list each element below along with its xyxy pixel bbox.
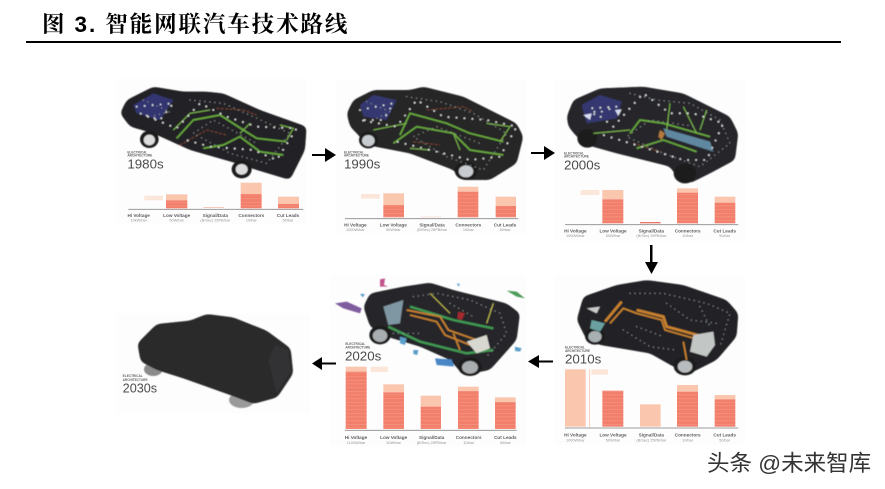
label: ELECTRICAL ARCHITECTURE 2020s (345, 342, 382, 363)
label: ELECTRICAL ARCHITECTURE 2010s: ARCHITECTURE (565, 349, 590, 353)
arrow: 2000s to 2010s (645, 245, 658, 274)
bar chart: 1990s: 50W/bar (386, 228, 401, 232)
label: ELECTRICAL ARCHITECTURE 2000s: ELECTRICAL (564, 151, 584, 155)
bar chart: 1990s: Hi Voltage (344, 222, 367, 227)
label: ELECTRICAL ARCHITECTURE 2010s: 2010s (565, 352, 602, 367)
bar chart: 1980s (127, 183, 303, 223)
bar chart: 2000s: (B/Sec) 25PB/bar (636, 234, 667, 238)
label: ELECTRICAL ARCHITECTURE 2020s: ELECTRICAL (345, 342, 365, 346)
bar chart: 1990s: 1000W/bar (346, 228, 365, 232)
bar chart: 1990s: (B/Sec) 25PB/bar (417, 228, 448, 232)
title: 图 3. 智能网联汽车技术路线 (42, 12, 349, 37)
bar chart: 2010s: Hi Voltage (564, 433, 587, 438)
bar chart: 2010s: 1000W/bar (566, 438, 585, 442)
label: ELECTRICAL ARCHITECTURE 2030s (123, 374, 157, 396)
bar chart: 2020s: Cut Leads (494, 435, 517, 440)
label: ELECTRICAL ARCHITECTURE 2010s: ELECTRICAL (565, 345, 585, 349)
label: ELECTRICAL ARCHITECTURE 2010s (565, 345, 602, 367)
bar chart: 2000s: Hi Voltage (564, 229, 587, 234)
bar chart: 1980s: 10/bar (246, 219, 257, 223)
bar chart: 2020s: Hi Voltage (345, 435, 368, 440)
arrow: 2020s to 2030s (312, 357, 336, 370)
bar chart: 1990s: 10/bar (463, 228, 474, 232)
label: ELECTRICAL ARCHITECTURE 2000s (564, 151, 601, 173)
bar chart: 2020s (345, 367, 517, 445)
panel: 2000s (555, 80, 745, 242)
bar chart: 1980s: (B/Sec) 25PB/bar (200, 219, 231, 223)
label: ELECTRICAL ARCHITECTURE 1980s: ELECTRICAL (127, 151, 147, 155)
car: covered 2030s (137, 314, 293, 408)
bar chart: 2010s: (B/Sec) 25PB/bar (636, 438, 667, 442)
label: ELECTRICAL ARCHITECTURE 1990s: ARCHITECTURE (344, 154, 369, 158)
bar chart: 1980s: Cut Leads (277, 213, 300, 218)
bar chart: 1980s: Hi Voltage (127, 213, 150, 218)
bar chart: 2000s: Cut Leads (713, 229, 736, 234)
label: ELECTRICAL ARCHITECTURE 2020s: 2020s (345, 348, 382, 363)
bar chart: 2020s: 50/bar (500, 441, 511, 445)
label: ELECTRICAL ARCHITECTURE 2030s: 2030s (123, 382, 157, 396)
bar chart: 2000s: Low Voltage (599, 229, 627, 234)
bar chart: 2020s: 50W/bar (386, 441, 402, 445)
bar chart: 2000s: Connectors (675, 229, 701, 234)
label: ELECTRICAL ARCHITECTURE 1990s: 1990s (344, 156, 381, 171)
bar chart: 2010s (564, 369, 738, 442)
label: ELECTRICAL ARCHITECTURE 1980s: 1980s (127, 156, 164, 171)
bar chart: 2000s: Signal/Data (639, 229, 664, 234)
bar chart: 2020s: 1100W/bar (347, 441, 366, 445)
car: 2020s (335, 278, 525, 376)
bar chart: 1980s: Connectors (238, 213, 265, 218)
bar chart: 2010s: 50/bar (719, 438, 731, 442)
attached sensors (335, 278, 525, 367)
panel: 1980s (117, 78, 307, 225)
bar chart: 1990s: Connectors (455, 222, 482, 227)
bar chart: 1980s: 50W/bar (169, 219, 185, 223)
car: 1980s (120, 87, 307, 180)
panel: 2010s (555, 275, 745, 445)
label: ELECTRICAL ARCHITECTURE 2000s: ARCHITECTURE (564, 155, 589, 159)
label: ELECTRICAL ARCHITECTURE 1990s: ELECTRICAL (344, 150, 364, 154)
bar chart: 1980s: Low Voltage (163, 213, 191, 218)
label: ELECTRICAL ARCHITECTURE 2030s: ARCHITECTURE (123, 378, 148, 382)
bar chart: 2010s: 10/bar (682, 438, 694, 442)
bar chart: 1990s: Signal/Data (419, 222, 445, 227)
car: 2000s (567, 87, 738, 183)
panel: 1990s (337, 80, 527, 233)
label: ELECTRICAL ARCHITECTURE 2030s: ELECTRICAL (123, 374, 143, 378)
arrow: 2010s to 2020s (528, 355, 553, 368)
label: ELECTRICAL ARCHITECTURE 1980s: ARCHITECTURE (127, 154, 152, 158)
bar chart: 1980s: Signal/Data (203, 213, 228, 218)
bar chart: 2020s: Low Voltage (380, 435, 408, 440)
bar chart: 2010s: Connectors (675, 433, 701, 438)
bar chart: 2010s: Low Voltage (599, 433, 627, 438)
bar chart: 2010s: Signal/Data (639, 433, 664, 438)
bar chart: 2020s: Signal/Data (419, 435, 445, 440)
bar chart: 2000s: 1000W/bar (566, 234, 585, 238)
car: 2010s (577, 280, 738, 375)
label: ELECTRICAL ARCHITECTURE 2000s: 2000s (564, 158, 601, 173)
bar chart: 2010s: 50W/bar (606, 438, 621, 442)
bar chart: 2020s: Connectors (456, 435, 482, 440)
bar chart: 1980s: 10kW/bar (130, 219, 148, 223)
arrow: 1980s to 1990s (312, 148, 336, 162)
bar chart: 1980s: 50/bar (283, 219, 294, 223)
bar chart: 1990s: Cut Leads (494, 222, 517, 227)
bar chart: 2020s: 10/bar (463, 441, 475, 445)
bar chart: 2010s: Cut Leads (713, 433, 736, 438)
bar chart: 2000s: 50W/bar (606, 234, 621, 238)
watermark: 头条 @未来智库 (707, 451, 871, 476)
bar chart: 2000s: 10/bar (682, 234, 694, 238)
bar chart: 1990s: 50/bar (500, 228, 511, 232)
bar chart: 1990s (344, 187, 518, 232)
panel: 2020s (330, 275, 527, 447)
bar chart: 2000s (564, 188, 738, 238)
bar chart: 1990s: Low Voltage (380, 222, 407, 227)
panel: 2030s (117, 313, 310, 413)
arrow: 1990s to 2000s (531, 146, 555, 160)
label: ELECTRICAL ARCHITECTURE 2020s: ARCHITECTURE (345, 346, 370, 350)
title rule (26, 41, 841, 43)
bar chart: 2000s: 50/bar (719, 234, 731, 238)
bar chart: 2020s: (B/Sec) 25PB/bar (417, 441, 447, 445)
car: 1990s (347, 87, 523, 180)
